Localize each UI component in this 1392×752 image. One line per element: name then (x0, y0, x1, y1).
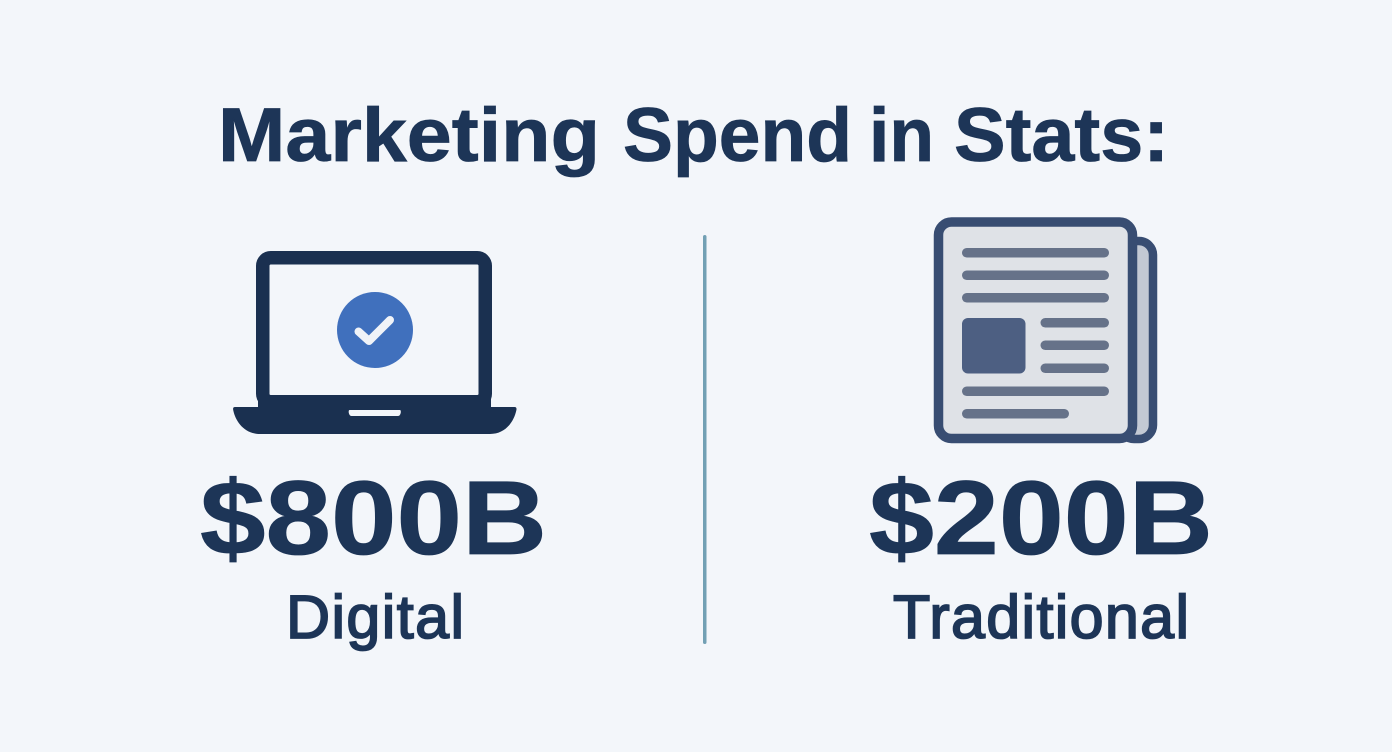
icon: newspaper (938, 222, 1153, 439)
title (218, 93, 1169, 178)
icon: blue check badge (337, 292, 413, 368)
front page (938, 222, 1132, 438)
image block (962, 318, 1026, 374)
vertical divider (703, 235, 706, 644)
title: Stats: (954, 93, 1169, 178)
digital spend value: $800B (200, 460, 547, 577)
icon: laptop with check mark (233, 258, 517, 434)
traditional spend value: $200B (869, 460, 1213, 577)
title: Marketing (218, 93, 600, 178)
traditional label: Traditional (893, 583, 1189, 651)
digital label: Digital (286, 583, 464, 651)
title: Spend (623, 93, 852, 178)
text lines (962, 248, 1109, 418)
title: in (869, 93, 934, 178)
back page (1120, 241, 1153, 439)
